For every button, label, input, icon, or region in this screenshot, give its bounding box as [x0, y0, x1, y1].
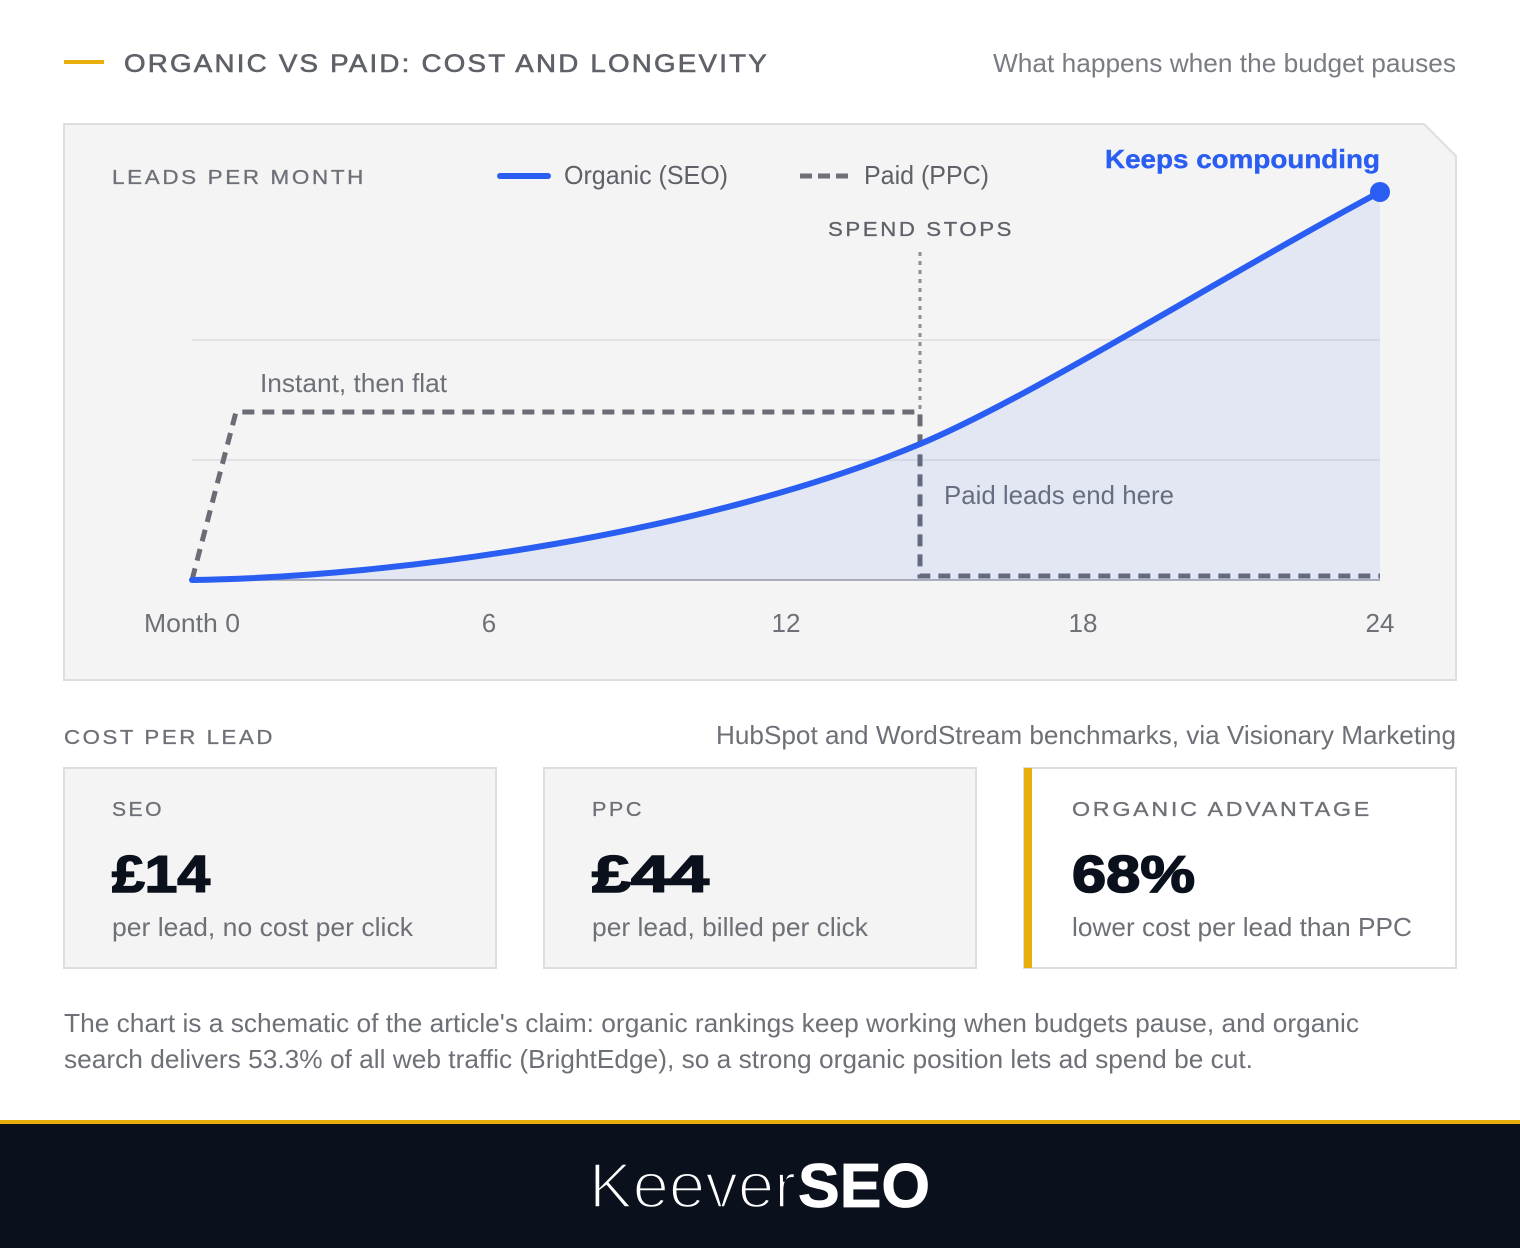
x axis labels: Month 0 [144, 608, 240, 638]
footnote [64, 1008, 1359, 1074]
annotation: instant then flat: Instant, then flat [260, 368, 448, 398]
panel: PPC card: per lead, billed per click [592, 912, 869, 942]
x axis labels: 6 [482, 608, 496, 638]
chart axis label: LEADS PER MONTH [112, 166, 366, 189]
panel: organic advantage card: lower cost per lead than PPC [1072, 912, 1412, 942]
x axis labels: 12 [772, 608, 800, 638]
panel: PPC card [544, 768, 976, 968]
panel: SEO card [64, 768, 496, 968]
footnote: search delivers 53.3% of all web traffic (BrightEdge), so a strong organic position lets ad spend be cut. [64, 1044, 1253, 1074]
subtitle: What happens when the budget pauses [993, 48, 1456, 78]
organic end dot [1370, 182, 1390, 202]
annotation: keeps compounding: Keeps compounding [1105, 144, 1380, 174]
gridlines [192, 340, 1380, 460]
footnote: The chart is a schematic of the article's claim: organic rankings keep working when budgets pause, and organic [64, 1008, 1359, 1038]
panel: organic advantage card [1024, 768, 1456, 968]
panel: PPC card: £44 [592, 846, 709, 904]
panel: chart [64, 124, 1456, 680]
legend: paid: Paid (PPC) [864, 160, 989, 190]
organic area fill [192, 192, 1380, 580]
annotation: paid leads end here: Paid leads end here [944, 480, 1174, 510]
baseline [192, 579, 1380, 581]
logo [589, 1150, 930, 1222]
paid line [192, 412, 1380, 580]
header accent line [64, 60, 104, 64]
x axis labels: 18 [1069, 608, 1097, 638]
cost per lead heading: COST PER LEAD [64, 726, 275, 749]
legend: organic: Organic (SEO) [564, 160, 728, 190]
footer band [0, 1120, 1520, 1248]
spend stops marker: SPEND STOPS [828, 218, 1014, 241]
x axis labels: 24 [1366, 608, 1394, 638]
panel: organic advantage card: ORGANIC ADVANTAGE [1072, 798, 1372, 821]
panel: SEO card: per lead, no cost per click [112, 912, 414, 942]
header [64, 48, 1456, 78]
logo: SEO [798, 1152, 930, 1221]
panel: PPC card: PPC [592, 798, 644, 821]
source note: HubSpot and WordStream benchmarks, via Visionary Marketing [716, 720, 1456, 750]
title: ORGANIC VS PAID: COST AND LONGEVITY [124, 50, 769, 78]
panel: organic advantage card: 68% [1072, 846, 1195, 904]
panel: SEO card: SEO [112, 798, 164, 821]
logo: Keever [589, 1150, 796, 1222]
organic line [192, 192, 1380, 580]
chart background with cut corner [64, 124, 1456, 680]
panel: SEO card: £14 [112, 846, 210, 904]
x axis labels [144, 608, 1394, 638]
legend [500, 160, 989, 190]
